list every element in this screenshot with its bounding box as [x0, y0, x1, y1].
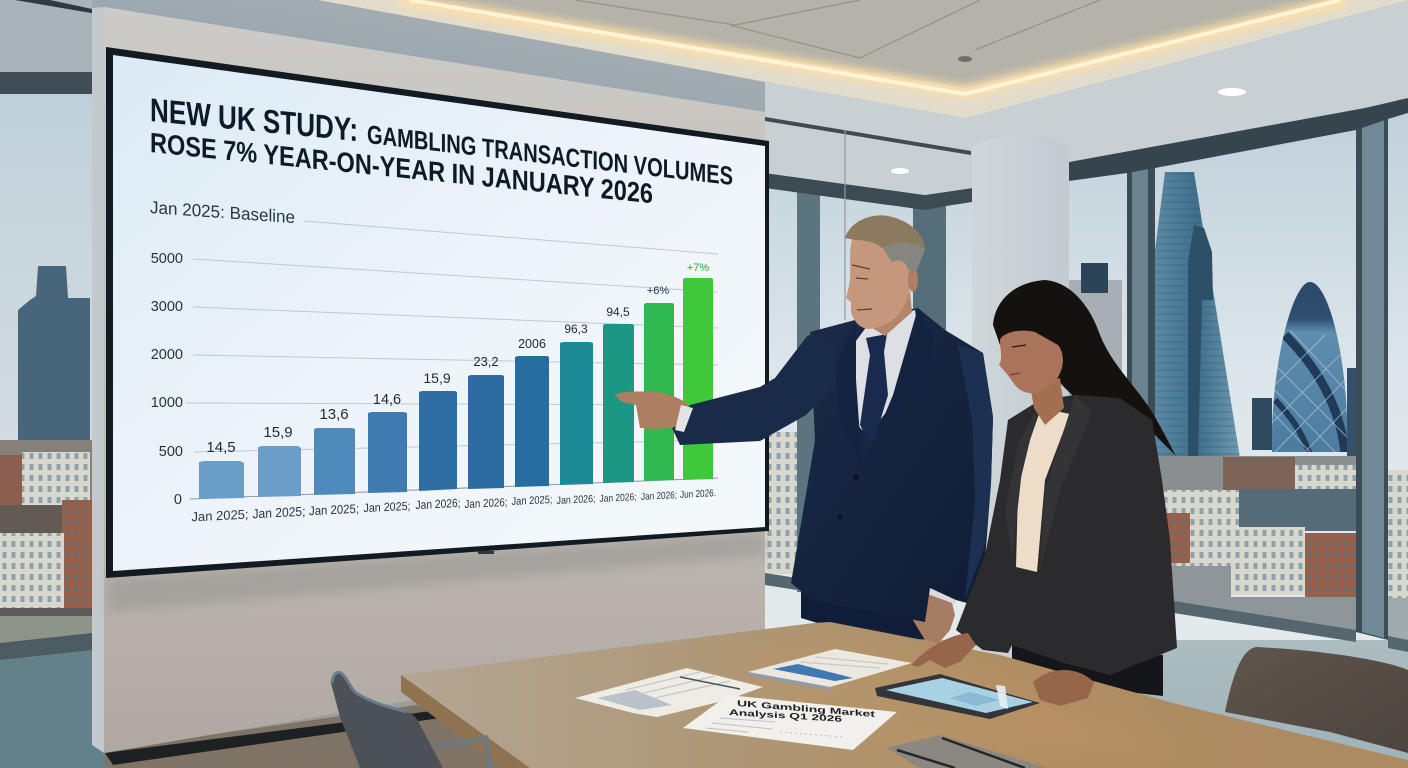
- back wall behind the screen: [92, 7, 765, 765]
- jacket body: [791, 308, 993, 622]
- y axis labels: 5000: [151, 251, 183, 267]
- chart title: ROSE 7% YEAR-ON-YEAR IN JANUARY 2026: [150, 127, 653, 209]
- value labels: [206, 262, 709, 456]
- shaded band above the wall: [92, 0, 765, 112]
- chart title: [150, 92, 733, 209]
- meeting table: [401, 622, 1408, 768]
- window frames: [765, 98, 1408, 652]
- value labels: +6%: [647, 285, 669, 297]
- tie: [860, 334, 888, 448]
- tablet with chart: [875, 674, 1040, 719]
- value labels: 2006: [518, 337, 546, 351]
- woman in black blazer: [956, 280, 1177, 696]
- glass partition and slot: [765, 117, 971, 320]
- table cable port: [887, 735, 1047, 768]
- left window with city view: [0, 72, 92, 660]
- value labels: 15,9: [423, 370, 451, 386]
- x axis labels: Jan 2026;: [600, 492, 636, 505]
- icon: the Shard tower: [1155, 172, 1240, 458]
- y axis labels: 3000: [151, 299, 183, 315]
- x axis labels: Jan 2026;: [641, 490, 677, 503]
- screen surface: [113, 55, 765, 571]
- document title text: UK Gambling Market: [737, 698, 875, 719]
- trousers: [1012, 640, 1163, 696]
- value labels: 13,6: [319, 406, 349, 423]
- face: [999, 331, 1063, 393]
- value labels: 14,6: [373, 392, 401, 408]
- neighbouring towers: [1252, 398, 1272, 450]
- x axis labels: Jan 2025;: [309, 502, 359, 518]
- y axis labels: 1000: [151, 395, 183, 411]
- pointing arm sleeve: [672, 335, 838, 445]
- y axis labels: 500: [159, 444, 183, 460]
- chart title: GAMBLING TRANSACTION VOLUMES: [367, 119, 733, 191]
- x axis labels: [192, 488, 716, 524]
- LED cove light: [400, 0, 1345, 94]
- right chair: [1225, 647, 1408, 753]
- pointing hand: [615, 391, 688, 429]
- grid lines: [186, 221, 718, 499]
- floor: timber strip under wall: [105, 690, 520, 768]
- x axis labels: Jun 2026.: [680, 488, 716, 501]
- cuff: [675, 405, 693, 432]
- hair back: [993, 280, 1176, 456]
- bars: [199, 278, 713, 499]
- presentation screen: [106, 47, 769, 578]
- ear: [908, 268, 918, 292]
- x axis labels: Jan 2025;: [252, 504, 306, 521]
- value labels: 96,3: [564, 322, 588, 336]
- x axis labels: Jan 2026;: [464, 497, 508, 511]
- lapels: [835, 308, 935, 468]
- x axis labels: Jan 2025;: [191, 507, 249, 524]
- x axis labels: Jan 2026;: [556, 493, 596, 507]
- shirt cuff at lower hand: [922, 586, 957, 606]
- bar chart: [151, 221, 718, 524]
- soffit below the light cove: [318, 0, 1408, 118]
- grey side hair: [880, 241, 925, 272]
- value labels: 14,5: [206, 439, 236, 456]
- ceiling: [0, 0, 1408, 320]
- eye, brow and mouth: [852, 265, 872, 310]
- baseline caption: Jan 2025: Baseline: [150, 197, 295, 227]
- screen frame: [106, 47, 769, 578]
- hair: [845, 215, 925, 250]
- left chair: [331, 671, 490, 768]
- value labels: +7%: [687, 262, 709, 274]
- value labels: 23,2: [473, 354, 499, 369]
- y axis labels: [151, 251, 183, 508]
- lower hand on table: [909, 593, 955, 644]
- value labels: 15,9: [263, 424, 293, 441]
- column: [972, 136, 1069, 660]
- x axis labels: Jan 2025;: [512, 494, 552, 508]
- recessed ceiling panel: [405, 0, 1345, 88]
- neck: [866, 292, 912, 336]
- value labels: 94,5: [606, 305, 630, 319]
- dark ceiling slot: [15, 0, 97, 14]
- document title text: Analysis Q1 2026: [729, 707, 842, 724]
- face: [846, 232, 925, 329]
- wood highlight: [700, 640, 1180, 760]
- low-rise buildings: [1155, 456, 1360, 510]
- document title text: [729, 698, 875, 724]
- ceiling panel joints: [575, 0, 1100, 58]
- woman's hands resting on table: [911, 633, 1094, 706]
- distant tower blocks: [1069, 280, 1122, 400]
- jacket buttons: [838, 474, 859, 520]
- document: report with grey block on table: [575, 668, 763, 717]
- y axis labels: 0: [174, 492, 182, 508]
- floor: left side: [0, 640, 110, 768]
- chart title: NEW UK STUDY:: [150, 92, 358, 149]
- right windows with London skyline: [765, 100, 1408, 643]
- neck: [1030, 378, 1064, 425]
- shirt: [853, 310, 918, 430]
- lapels: [1005, 395, 1092, 570]
- eye and mouth: [1010, 345, 1026, 375]
- jacket sleeve highlight: [958, 345, 993, 600]
- y axis labels: 2000: [151, 347, 183, 363]
- document: UK Gambling Market Analysis: [683, 695, 897, 750]
- x axis labels: Jan 2026;: [416, 496, 460, 512]
- trousers: [801, 590, 930, 640]
- document: report with blue chart on table: [748, 649, 912, 690]
- ceiling spot lights: [891, 56, 1246, 174]
- x axis labels: Jan 2025;: [363, 499, 411, 515]
- man in navy suit pointing at screen: [615, 215, 993, 644]
- jacket: [956, 395, 1177, 675]
- floor: right side: [765, 570, 1408, 768]
- icon: the Gherkin tower: [1272, 282, 1347, 452]
- blouse: [1016, 408, 1070, 572]
